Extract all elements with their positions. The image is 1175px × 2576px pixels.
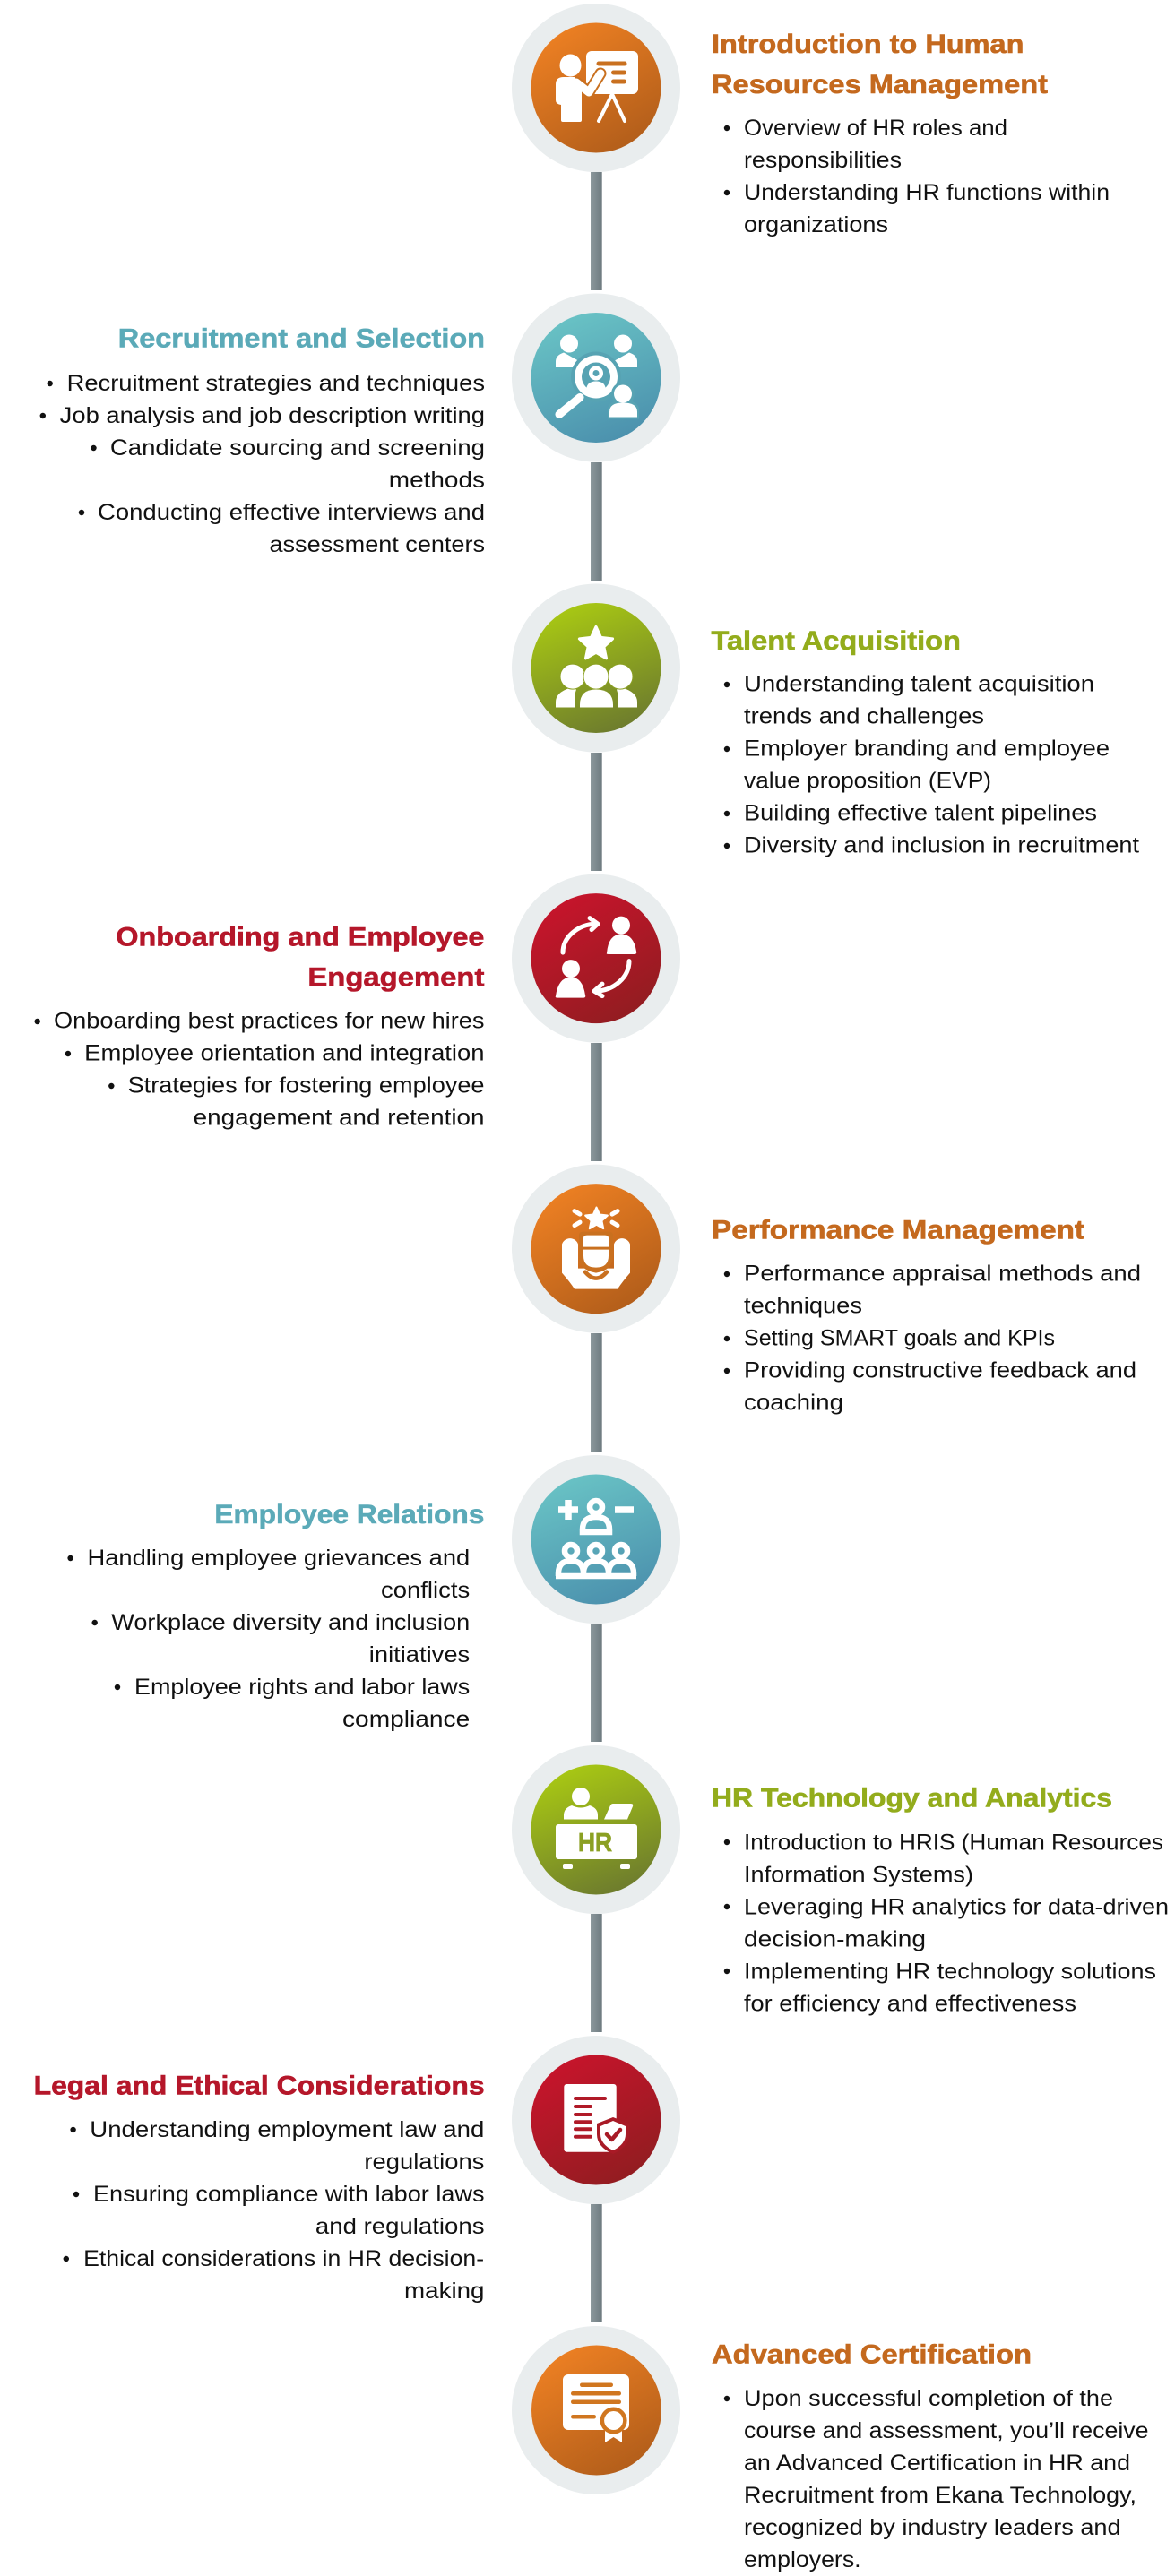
panel: Talent Acquisition: [712, 626, 1139, 858]
bullet list: Overview of HR roles and: [744, 116, 1007, 141]
bullet list: Upon successful completion of the: [744, 2386, 1113, 2411]
panel: Legal and Ethical Considerations: [34, 2071, 485, 2304]
bullet list: Leveraging HR analytics for data-driven: [744, 1894, 1169, 1919]
bullet list: Performance appraisal methods and: [744, 1262, 1141, 1287]
icon: presenter at board: [556, 51, 638, 122]
bullet list: Diversity and inclusion in recruitment: [744, 833, 1139, 858]
node: Talent circle: [512, 584, 680, 753]
panel: Advanced Certification: [712, 2339, 1149, 2572]
node: Introduction circle: [512, 4, 680, 172]
panel: Employee Relations: [67, 1500, 484, 1732]
bullet list: responsibilities: [744, 148, 902, 173]
bullet list: [34, 1009, 484, 1131]
bullet list: [40, 371, 485, 557]
bullet list: [64, 2117, 484, 2304]
bullet list: compliance: [342, 1707, 470, 1732]
connector bars: [591, 172, 602, 2322]
icon: team with star: [556, 627, 637, 708]
bullet list: coaching: [744, 1391, 843, 1416]
bullet list: Understanding talent acquisition: [744, 672, 1094, 697]
bullet list: [724, 116, 1110, 237]
heading: HR Technology and Analytics: [712, 1784, 1112, 1814]
panel: Recruitment and Selection: [40, 324, 485, 557]
bullet list: Candidate sourcing and screening: [110, 435, 485, 461]
bullet list: [724, 1830, 1169, 2016]
icon: certificate with seal: [563, 2374, 629, 2442]
node: Recruitment circle: [512, 294, 680, 462]
bullet list: conflicts: [381, 1578, 470, 1603]
panel: HR Technology and Analytics: [712, 1784, 1169, 2016]
bullet list: trends and challenges: [744, 704, 984, 729]
bullet list: Ensuring compliance with labor laws: [93, 2182, 484, 2207]
bullet list: Understanding HR functions within: [744, 180, 1110, 205]
icon: magnifier over candidates: [556, 335, 639, 419]
bullet list: Employer branding and employee: [744, 737, 1110, 762]
bullet list: methods: [389, 468, 485, 493]
heading: Introduction to Human: [712, 30, 1024, 59]
icon: HR desk with laptop: HR: [578, 1829, 612, 1857]
bullet list: Employee orientation and integration: [84, 1041, 484, 1066]
node: Performance circle: [512, 1165, 680, 1333]
heading: Onboarding and Employee: [116, 922, 484, 952]
icon: celebrating employee with star: [562, 1208, 630, 1289]
bullet list: [724, 672, 1139, 858]
heading: Resources Management: [712, 70, 1048, 99]
bullet list: Job analysis and job description writing: [60, 403, 485, 428]
bullet list: an Advanced Certification in HR and: [744, 2451, 1130, 2476]
bullet list: Employee rights and labor laws: [134, 1675, 470, 1700]
bullet list: Information Systems): [744, 1862, 973, 1887]
bullet list: making: [404, 2279, 484, 2304]
heading: Legal and Ethical Considerations: [34, 2071, 485, 2100]
bullet list: Recruitment from Ekana Technology,: [744, 2483, 1136, 2508]
bullet list: Setting SMART goals and KPIs: [744, 1326, 1055, 1351]
bullet list: [724, 2386, 1149, 2572]
bullet list: and regulations: [315, 2214, 484, 2239]
node: Onboarding circle: [512, 874, 680, 1043]
heading: Engagement: [307, 963, 484, 993]
bullet list: [67, 1546, 470, 1732]
heading: [712, 30, 1048, 99]
bullet list: Handling employee grievances and: [88, 1546, 470, 1571]
node: Advanced Certification circle: [512, 2326, 680, 2494]
bullet list: Strategies for fostering employee: [128, 1073, 484, 1098]
bullet list: course and assessment, you’ll receive: [744, 2418, 1149, 2443]
bullet list: Workplace diversity and inclusion: [111, 1610, 470, 1635]
bullet list: Conducting effective interviews and: [98, 500, 485, 525]
bullet list: assessment centers: [269, 532, 485, 557]
node: Employee Relations circle: [512, 1455, 680, 1624]
bullet list: Building effective talent pipelines: [744, 801, 1097, 826]
node: Legal circle: [512, 2036, 680, 2204]
heading: Recruitment and Selection: [118, 324, 485, 354]
heading: Advanced Certification: [712, 2339, 1032, 2369]
bullet list: Recruitment strategies and techniques: [67, 371, 485, 396]
bullet list: recognized by industry leaders and: [744, 2515, 1121, 2540]
bullet list: organizations: [744, 212, 888, 237]
bullet list: Ethical considerations in HR decision-: [83, 2246, 484, 2271]
bullet list: regulations: [364, 2150, 484, 2175]
icon: document with shield: [564, 2084, 629, 2154]
icon: people exchange arrows: [556, 917, 636, 998]
bullet list: for efficiency and effectiveness: [744, 1991, 1076, 2016]
panel: Onboarding and Employee Engagement: [34, 922, 484, 1131]
bullet list: Implementing HR technology solutions: [744, 1959, 1156, 1984]
bullet list: initiatives: [369, 1642, 470, 1667]
bullet list: engagement and retention: [194, 1106, 484, 1131]
bullet list: [724, 1262, 1141, 1416]
bullet list: value proposition (EVP): [744, 769, 991, 794]
icon: HR desk with laptop: [556, 1788, 637, 1869]
bullet list: employers.: [744, 2547, 861, 2572]
heading: Employee Relations: [214, 1500, 484, 1529]
node: HR Technology circle: [512, 1745, 680, 1914]
bullet list: Onboarding best practices for new hires: [54, 1009, 484, 1034]
heading: Talent Acquisition: [712, 626, 961, 656]
bullet list: decision-making: [744, 1926, 926, 1951]
bullet list: techniques: [744, 1294, 862, 1319]
bullet list: Providing constructive feedback and: [744, 1358, 1136, 1383]
heading: [116, 922, 484, 993]
bullet list: Introduction to HRIS (Human Resources: [744, 1830, 1163, 1855]
icon: person with plus minus above group: [556, 1500, 636, 1576]
panel: Introduction to Human Resources Management: [712, 30, 1110, 237]
heading: Performance Management: [712, 1216, 1084, 1245]
bullet list: Understanding employment law and: [90, 2117, 484, 2142]
panel: Performance Management: [712, 1216, 1141, 1416]
